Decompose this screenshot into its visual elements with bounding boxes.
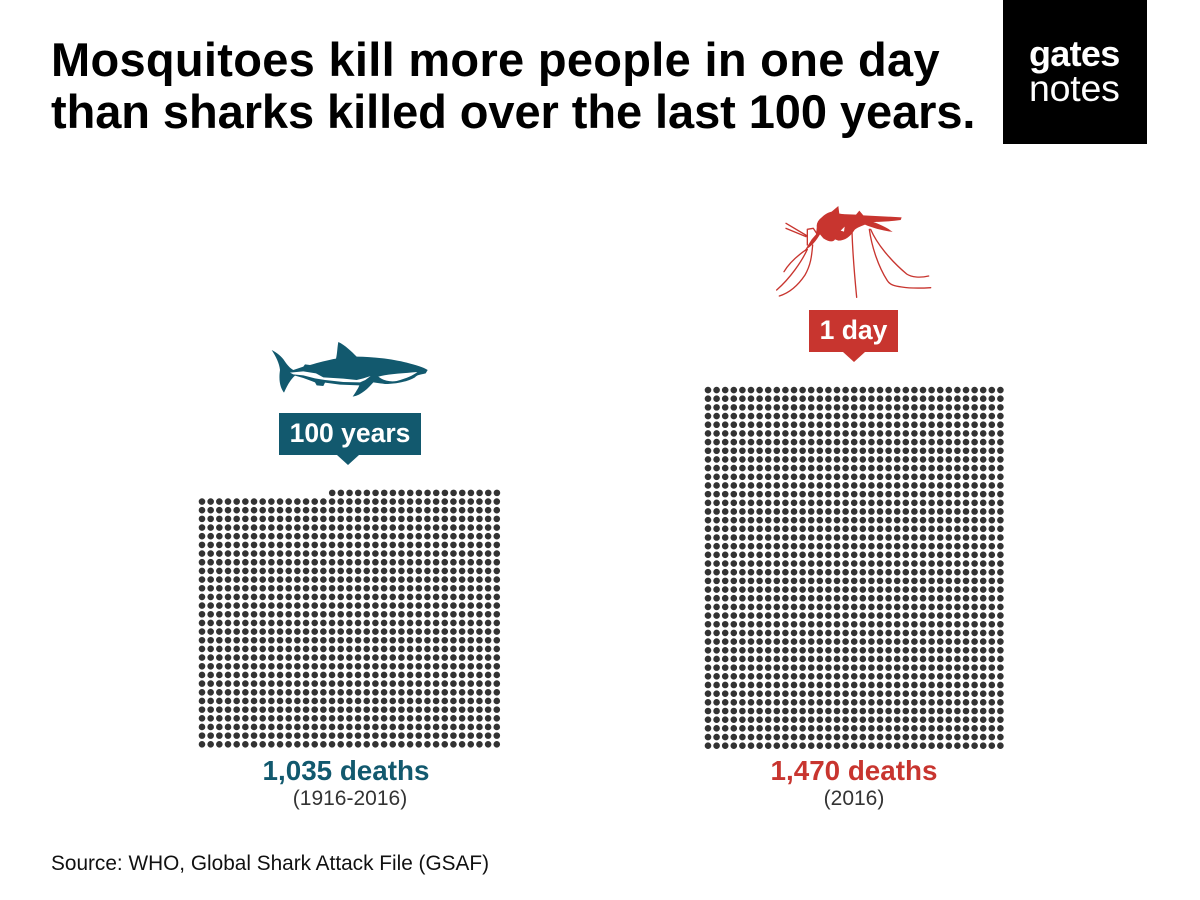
label: shark period: (1916-2016) — [293, 787, 407, 810]
tag: 100 years — [279, 413, 421, 465]
label: mosquito deaths: 1,470 deaths — [771, 755, 937, 786]
logo: gates notes: gates — [1029, 33, 1120, 74]
logo: gates notes — [1003, 0, 1147, 144]
tag: 100 years: 100 years — [290, 418, 410, 448]
logo: gates notes: notes — [1029, 67, 1120, 109]
title: than sharks killed over the last 100 years. — [51, 85, 975, 138]
tag: 1 day: 1 day — [820, 315, 887, 345]
source: Source: WHO, Global Shark Attack File (GSAF) — [51, 852, 489, 875]
label: mosquito period: (2016) — [824, 787, 884, 810]
title: Mosquitoes kill more people in one day — [51, 33, 940, 86]
title — [51, 33, 975, 138]
tag: 1 day — [809, 310, 898, 362]
label: shark deaths: 1,035 deaths — [263, 755, 429, 786]
icon: mosquito — [776, 206, 932, 298]
icon: shark — [272, 342, 428, 397]
